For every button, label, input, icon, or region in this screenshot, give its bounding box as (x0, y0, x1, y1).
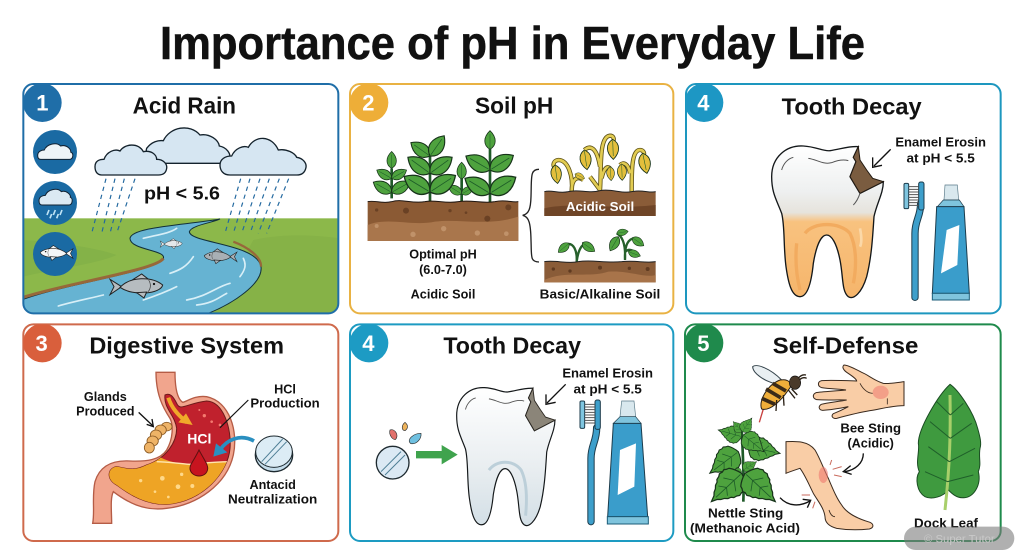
tooth (457, 388, 555, 526)
acidic soil (544, 190, 656, 216)
pH label: pH < 5.6 (144, 182, 220, 203)
callout: Enamel Erosin (562, 367, 653, 381)
callout (895, 136, 986, 165)
heading: Soil pH (475, 92, 553, 118)
labels: Neutralization (228, 492, 317, 506)
callout: Enamel Erosin (895, 136, 986, 150)
callout (562, 367, 653, 396)
blue arrow (213, 438, 254, 457)
pill (376, 446, 409, 479)
bee (753, 366, 807, 422)
callout: at pH < 5.5 (906, 151, 975, 165)
clouds (95, 128, 306, 175)
healthy plants (370, 131, 520, 203)
hand (813, 365, 904, 418)
watermark: © Super Tutor (924, 533, 995, 545)
glands (144, 422, 172, 453)
panel: tooth decay top (685, 83, 1001, 313)
labels: (Acidic) (847, 437, 894, 451)
labels (76, 382, 320, 506)
wilted leaves (550, 139, 653, 184)
watermark (904, 527, 1014, 550)
heading: Self-Defense (773, 332, 918, 358)
labels: Glands (84, 390, 127, 404)
badge 1: 1 (36, 91, 48, 116)
badge 4 (350, 324, 388, 362)
panel: tooth decay bottom (350, 324, 673, 541)
labels: Nettle Sting (708, 507, 783, 521)
badge 2: 2 (362, 91, 374, 116)
icon: cloud (33, 130, 77, 174)
fish medium (204, 249, 237, 264)
badge 2 (350, 83, 388, 122)
bee sting arrow (843, 453, 863, 474)
panel: self-defense (685, 324, 1014, 550)
badge 5: 5 (697, 331, 709, 356)
tooth (772, 146, 883, 297)
fish large (110, 274, 163, 298)
labels: Produced (76, 405, 135, 419)
toothpaste (607, 401, 648, 524)
leg (786, 441, 873, 530)
callout: at pH < 5.5 (573, 382, 642, 396)
heading: Tooth Decay (782, 93, 922, 119)
icon: fish (33, 232, 77, 276)
labels: Dock Leaf (914, 516, 979, 530)
heading: Tooth Decay (443, 332, 581, 358)
wilted plants (554, 136, 644, 192)
nettle arrow (780, 498, 811, 508)
stomach (93, 372, 235, 523)
labels: Production (250, 397, 320, 411)
labels: Antacid (249, 478, 296, 492)
labels: Optimal pH (409, 247, 477, 261)
badge 3 (23, 324, 62, 362)
acid drop (190, 450, 208, 476)
panel: acid rain (23, 83, 338, 313)
arrow (546, 384, 566, 404)
HCl pointer (220, 400, 248, 428)
labels (690, 421, 979, 535)
badge 1 (23, 83, 62, 122)
badge 4: 4 (362, 331, 375, 356)
labels (409, 247, 660, 302)
badge 4: 4 (697, 91, 710, 116)
heading: Acid Rain (133, 92, 236, 118)
bracket (523, 169, 539, 262)
ground (23, 218, 338, 313)
labels: Basic/Alkaline Soil (540, 288, 660, 302)
alkaline soil (544, 261, 656, 282)
toothbrush (904, 182, 924, 297)
large soil (368, 201, 518, 241)
labels: HCl (274, 382, 296, 396)
river (23, 219, 261, 313)
nettle (701, 415, 785, 512)
dock leaf (917, 384, 981, 510)
rain left (92, 179, 135, 233)
toothbrush (580, 400, 600, 522)
seedlings (556, 228, 646, 262)
badge 5 (685, 324, 723, 362)
green arrow (416, 445, 458, 464)
labels: (Methanoic Acid) (690, 521, 800, 535)
yellow arrow (168, 398, 193, 425)
badge 3: 3 (36, 331, 48, 356)
drops (390, 422, 421, 444)
labels: Bee Sting (840, 421, 901, 435)
arrow (873, 149, 891, 167)
icon: rain cloud (33, 181, 77, 225)
panel: digestive system (23, 324, 338, 541)
badge 4 (685, 83, 723, 122)
HCl label: HCl (187, 430, 211, 446)
sting marks (802, 460, 842, 508)
labels: Acidic Soil (411, 288, 475, 302)
panel: soil pH (350, 83, 673, 313)
fish small (160, 239, 182, 249)
toothpaste (932, 185, 969, 300)
heading: Digestive System (89, 332, 284, 358)
gland arrow (139, 412, 153, 427)
acidic soil: Acidic Soil (566, 199, 634, 214)
labels: (6.0-7.0) (419, 263, 467, 277)
title: Importance of pH in Everyday Life (160, 17, 865, 69)
rain right (225, 179, 289, 233)
antacid pill (255, 436, 293, 472)
